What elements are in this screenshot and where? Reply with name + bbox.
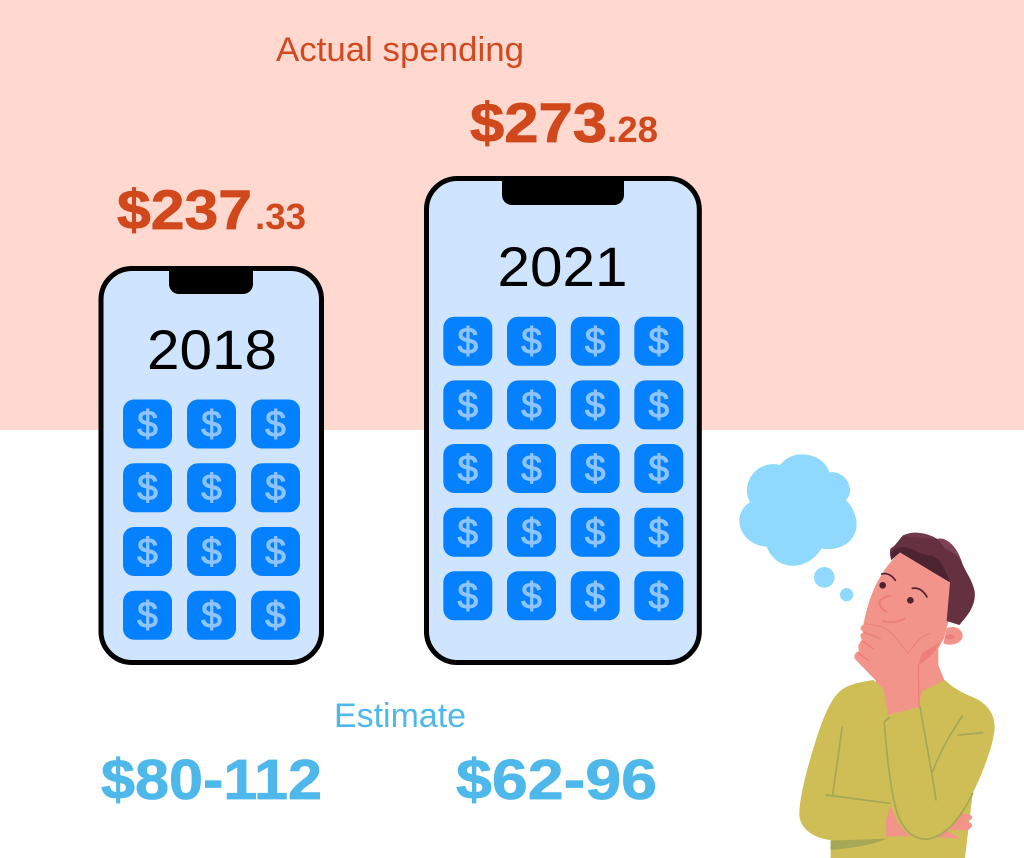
- ear: [943, 627, 963, 645]
- dollar tile grid: $: [458, 321, 478, 362]
- dollar tile grid: $: [137, 595, 158, 636]
- dollar tile grid: $: [201, 404, 222, 444]
- panel: pink background: [0, 0, 1024, 430]
- dollar tile grid: $: [649, 575, 669, 616]
- head: [863, 533, 975, 712]
- illustration: thinking man: [799, 533, 995, 858]
- jaw shadow: [918, 642, 940, 665]
- dollar tile grid: $: [137, 531, 158, 572]
- dollar tile grid: $: [521, 321, 542, 362]
- shirt fold lines: [826, 707, 983, 839]
- dollar tile grid: $: [585, 384, 605, 425]
- dollar tile grid: $: [649, 384, 669, 425]
- dollar tile grid: $: [137, 404, 158, 444]
- finger lines: [858, 624, 930, 707]
- shirt: [799, 680, 995, 858]
- dollar tile grid: $: [585, 321, 605, 362]
- hand on chin: [854, 624, 940, 715]
- face details: [880, 574, 927, 622]
- dollar tile grid: $: [649, 321, 669, 362]
- dollar tile grid: $: [265, 467, 286, 508]
- dollar tile grid: $: [201, 595, 222, 636]
- dollar tile grid: $: [458, 575, 478, 616]
- heading: estimate: Estimate: [334, 697, 466, 735]
- year label: 2018: [147, 318, 277, 381]
- dollar tile grid: $: [521, 575, 542, 616]
- dollar tile grid: [443, 317, 683, 620]
- dollar tile grid: $: [521, 448, 542, 489]
- dollar tile grid: $: [649, 512, 669, 553]
- value: 2021 actual: $273 .28: [470, 91, 658, 154]
- phone notch: [502, 180, 624, 205]
- dollar tile grid: $: [137, 467, 158, 508]
- dollar tile grid: [123, 400, 300, 640]
- value: 2018 estimate: $80-112: [101, 748, 322, 812]
- neck and face: [863, 552, 950, 712]
- lower hand fingers: [886, 807, 972, 838]
- icon: thought bubble: [739, 454, 857, 601]
- dollar tile grid: $: [458, 512, 478, 553]
- dollar tile grid: $: [201, 467, 222, 508]
- phone: 2018: [101, 268, 322, 662]
- dollar tile grid: $: [585, 575, 605, 616]
- dollar tile grid: $: [585, 448, 605, 489]
- value: 2021 estimate: $62-96: [456, 748, 657, 812]
- dollar tile grid: $: [265, 531, 286, 572]
- forearm sleeve: [890, 780, 973, 839]
- year label: 2021: [498, 235, 628, 298]
- hair: [890, 533, 975, 625]
- dollar tile grid: $: [265, 595, 286, 636]
- dollar tile grid: $: [458, 448, 478, 489]
- dollar tile grid: $: [201, 531, 222, 572]
- dollar tile grid: $: [585, 512, 605, 553]
- value: 2018 actual: $237 .33: [117, 178, 306, 241]
- dollar tile grid: $: [649, 448, 669, 489]
- heading: actual spending: Actual spending: [276, 31, 524, 69]
- dollar tile grid: $: [521, 384, 542, 425]
- dollar tile grid: $: [458, 384, 478, 425]
- dollar tile grid: $: [521, 512, 542, 553]
- shirt shadow: [831, 839, 887, 850]
- phone notch: [169, 270, 253, 294]
- phone: 2021: [426, 178, 699, 662]
- dollar tile grid: $: [265, 404, 286, 444]
